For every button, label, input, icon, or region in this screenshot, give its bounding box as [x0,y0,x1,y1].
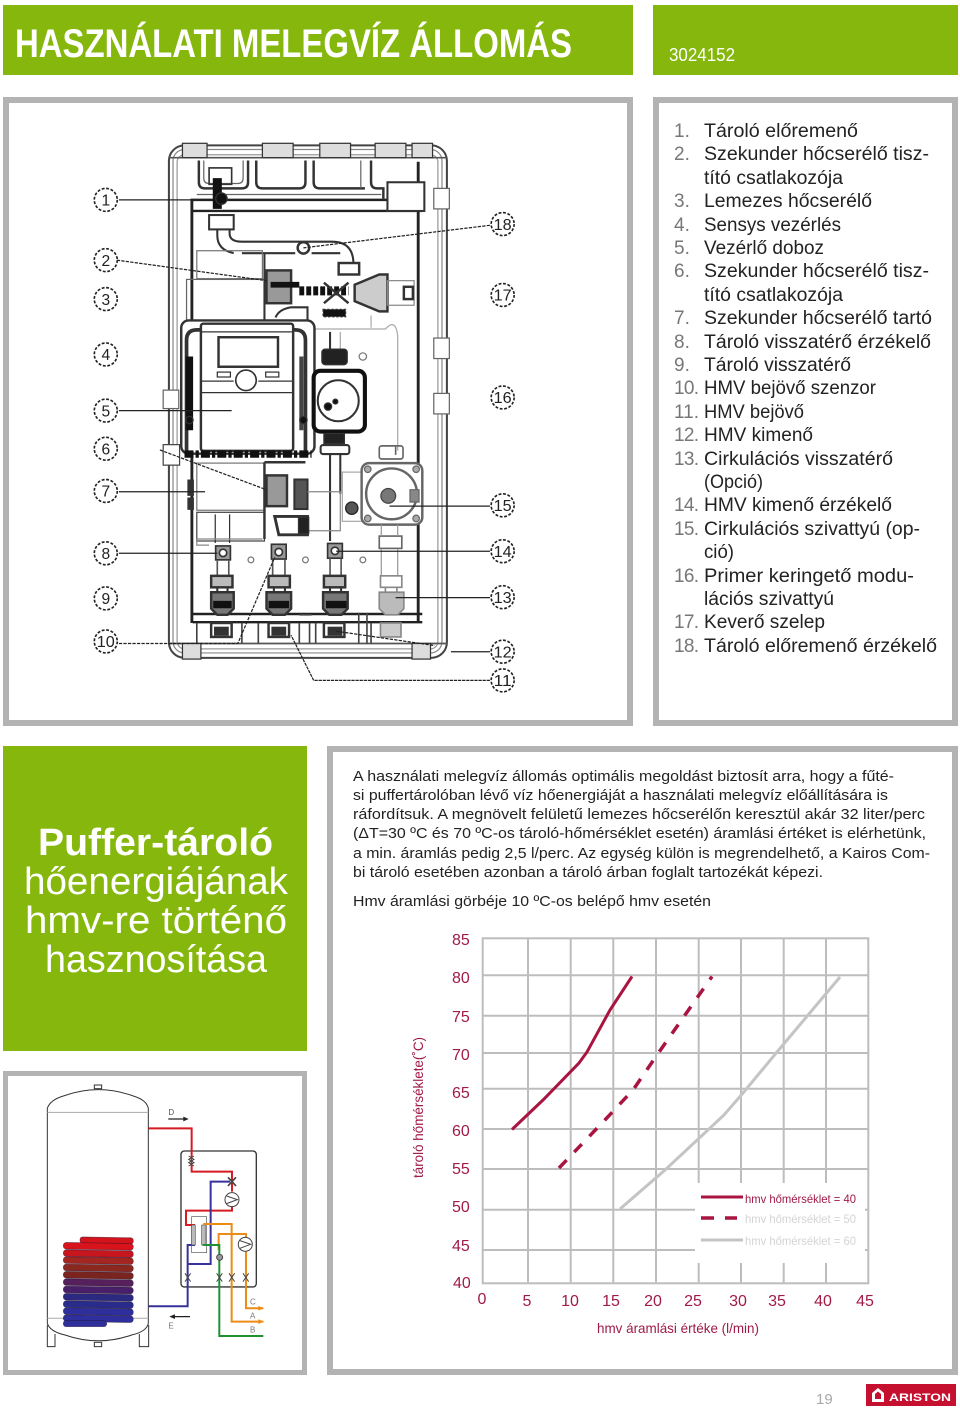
list labels: Lemezes hőcserélő [704,191,872,212]
x axis labels: 35 [768,1293,786,1310]
curve: hmv 50 [559,976,712,1168]
flow arrows and letters: D [168,1108,174,1117]
page number: 19 [816,1391,833,1408]
callout numbers: 9 [101,591,110,608]
callout numbers: 6 [101,441,110,458]
list labels: (Opció) [704,472,763,493]
list labels: ció) [704,542,734,563]
y axis labels: 45 [452,1238,470,1255]
valve 2 [266,576,291,637]
chart [410,932,874,1336]
panel: green heading: hasznosítása [45,939,268,981]
valve 3 [323,576,348,637]
y axis labels [452,932,471,1292]
cabinet frame [163,143,449,659]
chart heading: Hmv áramlási görbéje 10 ºC-os belépő hmv esetén [353,893,711,910]
x axis labels: 10 [561,1293,579,1310]
callout numbers [97,193,512,690]
list labels: Szekunder hőcserélő tisz- [704,144,929,165]
exchanger [192,1217,207,1253]
x axis labels: 15 [602,1293,620,1310]
callout numbers: 17 [494,288,512,305]
valve 1 [211,576,234,637]
callout numbers: 5 [101,403,110,420]
list numbers: 3. [674,191,690,212]
list labels: Tároló visszatérő [704,355,851,376]
panel: green heading: hőenergiájának [24,861,289,903]
y axis labels: 85 [452,932,470,949]
list numbers: 2. [674,144,690,165]
legend [701,1192,856,1248]
list numbers: 13. [674,449,699,470]
y axis title: tároló hőmérséklete(˚C) [410,1037,426,1178]
list labels: HMV kimenő [704,425,813,446]
y axis labels: 55 [452,1161,470,1178]
sensors and lower valves [197,539,404,644]
list numbers [674,121,699,657]
logo: Ariston: ARISTON [889,1392,951,1404]
list labels: Cirkulációs szivattyú (op- [704,519,920,540]
callout numbers: 16 [494,390,512,407]
x axis labels: 25 [684,1293,702,1310]
list numbers: 10. [674,378,699,399]
grid [483,938,868,1283]
callout numbers: 18 [494,217,512,234]
y axis labels: 50 [452,1199,470,1216]
module box [181,1151,256,1287]
callout numbers: 15 [494,498,512,515]
technical drawing [94,143,514,692]
list numbers: 16. [674,566,699,587]
description text: A használati melegvíz állomás optimális megoldást biztosít arra, hogy a fűté- [353,768,894,785]
callout numbers: 3 [101,292,110,309]
numbered callouts [94,188,514,692]
x axis labels [478,1291,874,1310]
callout numbers: 1 [101,193,110,210]
description text: ráfordítsuk. A megnövelt felületű lemezes hőcserélőn keresztül akár 32 liter/perc [353,806,926,823]
y axis labels: 65 [452,1085,470,1102]
list labels: tító csatlakozója [704,168,843,189]
x axis labels: 40 [814,1293,832,1310]
callout numbers: 8 [101,546,110,563]
list labels: tító csatlakozója [704,285,843,306]
list labels: Tároló visszatérő érzékelő [704,332,931,353]
list numbers: 1. [674,121,690,142]
description text: (ΔT=30 ºC és 70 ºC-os tároló-hőmérséklet esetén) áramlási értéket is elérhetünk, [353,825,926,842]
panel: station diagram [6,100,630,723]
list labels: Vezérlő doboz [704,238,824,259]
x axis labels: 20 [644,1293,662,1310]
list numbers: 12. [674,425,699,446]
x axis labels: 0 [478,1291,487,1308]
panel: green heading: Puffer-tároló [38,822,273,864]
secondary pump [342,446,422,576]
flow arrows and letters: E [168,1321,174,1330]
description text [353,768,930,881]
primary pump [314,332,367,541]
flow arrows and letters: A [250,1311,256,1320]
flow arrows and letters: B [250,1325,255,1334]
curve: hmv 60 [620,977,840,1209]
lower heat exchanger group [191,462,340,543]
legend: hmv hőmérséklet = 40 [745,1192,856,1206]
x axis labels: 5 [523,1293,532,1310]
callout numbers: 12 [494,644,512,661]
tank body [47,1085,149,1347]
list numbers: 15. [674,519,699,540]
logo: Ariston [866,1384,956,1406]
product code banner: 3024152 [669,45,735,65]
callout numbers: 10 [97,634,115,651]
list labels: Szekunder hőcserélő tartó [704,308,932,329]
y axis labels: 70 [452,1047,470,1064]
icon: house [872,1388,884,1402]
y axis labels: 80 [452,970,470,987]
list labels: Keverő szelep [704,612,825,633]
list labels: Szekunder hőcserélő tisz- [704,261,929,282]
curve: hmv 40 [512,976,632,1130]
valve 4 [379,576,404,637]
heating coil [63,1237,133,1327]
callout numbers: 7 [101,484,110,501]
cold green pipe [203,1245,263,1336]
list numbers: 5. [674,238,690,259]
list labels: Primer keringető modu- [704,566,914,587]
y axis labels: 75 [452,1009,470,1026]
list labels: lációs szivattyú [704,589,834,610]
return pipes [148,1182,230,1306]
list labels: Sensys vezérlés [704,215,841,236]
callout numbers: 14 [494,544,512,561]
title banner [3,5,633,75]
callout numbers: 4 [101,347,110,364]
callout numbers: 13 [494,590,512,607]
callout numbers: 2 [101,253,110,270]
panel: green heading: hmv-re történő [25,900,287,942]
x axis labels: 45 [856,1293,874,1310]
list labels: Tároló előremenő érzékelő [704,636,937,657]
panel: green heading [3,746,307,1051]
y axis labels: 60 [452,1123,470,1140]
list labels: Cirkulációs visszatérő [704,449,893,470]
legend: hmv hőmérséklet = 50 [745,1212,856,1226]
list labels [704,121,937,657]
list numbers: 6. [674,261,690,282]
panel: description and chart [330,749,955,1372]
control box [181,320,314,454]
panel: storage tank schematic [6,1074,304,1372]
list numbers: 4. [674,215,690,236]
description text: si puffertárolóban lévő víz hőenergiáját a használati melegvíz előállítására is [353,787,888,804]
list numbers: 17. [674,612,699,633]
list numbers: 18. [674,636,699,657]
list labels: HMV bejövő [704,402,804,423]
flow arrows and letters [168,1108,264,1334]
title banner: HASZNÁLATI MELEGVÍZ ÁLLOMÁS [15,21,572,66]
x axis labels: 30 [729,1293,747,1310]
panel: parts list [656,100,955,723]
description text: bi tároló esetében azonban a tároló árban foglalt tartozékát képezi. [353,864,823,881]
callout numbers: 11 [494,673,512,690]
upper pipework and mixing valve [187,168,414,451]
list labels: HMV bejövő szenzor [704,378,877,399]
description text: a min. áramlás pedig 2,5 l/perc. Az egység külön is megrendelhető, a Kairos Com- [353,845,930,862]
list numbers: 7. [674,308,690,329]
leader lines [117,200,490,680]
hot supply pipes [148,1128,232,1225]
secondary orange pipes [203,1224,263,1322]
list numbers: 11. [674,402,699,423]
list labels: Tároló előremenő [704,121,858,142]
list numbers: 8. [674,332,690,353]
product code banner [653,5,958,75]
y axis labels: 40 [453,1275,471,1292]
list numbers: 14. [674,495,699,516]
pumps and valves [185,1156,252,1282]
list numbers: 9. [674,355,690,376]
list labels: HMV kimenő érzékelő [704,495,892,516]
flow arrows and letters: C [250,1297,256,1306]
legend: hmv hőmérséklet = 60 [745,1234,856,1248]
x axis title: hmv áramlási értéke (l/min) [597,1320,759,1336]
